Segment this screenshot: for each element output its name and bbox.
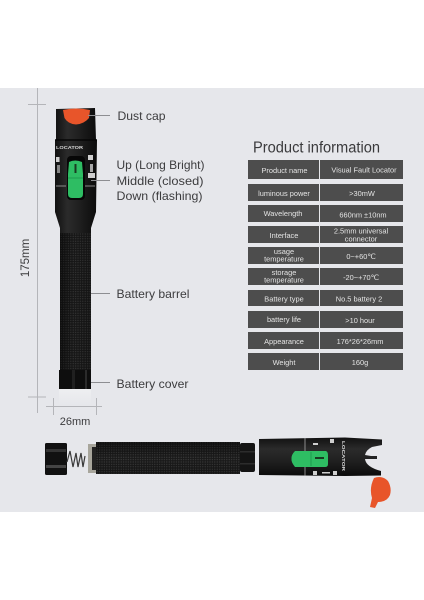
dimension: width 26mm: 26mm	[60, 416, 90, 428]
heading: product information: Product information	[253, 140, 380, 156]
row: storage temperature: storage	[272, 268, 296, 277]
pen head	[55, 108, 97, 233]
markings	[313, 439, 337, 475]
green slider	[67, 156, 85, 200]
row: product name: Visual Fault Locator	[331, 166, 397, 174]
background panel	[0, 88, 424, 512]
row: storage temperature: temperature	[264, 276, 304, 284]
product information table	[248, 160, 403, 370]
pen reflection	[59, 389, 91, 405]
open dust cap	[370, 477, 391, 508]
dust cap	[63, 108, 90, 124]
label: dust cap	[88, 109, 166, 123]
row: interface: 2.5mm universal	[334, 226, 388, 236]
row: storage temperature	[248, 268, 403, 285]
battery cover	[45, 443, 67, 475]
label: switch positions: Down (flashing)	[116, 189, 202, 203]
dimension: height 175mm: 175mm	[20, 239, 32, 277]
battery barrel	[60, 233, 91, 370]
barrel	[96, 442, 240, 474]
row: appearance: 176*26*26mm	[337, 337, 383, 346]
row: usage temperature: 0~+60℃	[346, 252, 376, 261]
row: battery type: No.5 battery 2	[336, 294, 382, 304]
row: weight	[248, 353, 403, 370]
label: dust cap: Dust cap	[118, 109, 166, 123]
disassembled pen	[45, 438, 391, 508]
barrel connector	[88, 444, 96, 473]
battery cover	[59, 370, 91, 389]
row: battery life: >10 hour	[345, 316, 375, 325]
row: battery type	[248, 290, 403, 306]
row: interface: connector	[345, 234, 378, 244]
dimension: width 26mm	[46, 398, 102, 428]
row: wavelength: Wavelength	[264, 209, 302, 218]
row: storage temperature: -20~+70℃	[343, 273, 379, 282]
row: appearance: Appearance	[264, 337, 304, 346]
row: weight: 160g	[352, 358, 368, 367]
collar	[240, 443, 255, 472]
row: product name: Product name	[261, 166, 308, 175]
row: battery life: battery life	[267, 315, 301, 324]
row: usage temperature	[248, 247, 403, 264]
row: usage temperature: temperature	[264, 254, 304, 264]
row: battery type: Battery type	[264, 294, 304, 304]
label: battery cover: Battery cover	[116, 377, 188, 391]
row: appearance	[248, 332, 403, 349]
row: luminous power: >30mW	[349, 189, 375, 198]
label: switch positions: Up (Long Bright)	[116, 158, 204, 172]
pen body	[259, 438, 382, 476]
row: usage temperature: usage	[274, 247, 294, 256]
row: luminous power: luminous power	[258, 189, 310, 198]
label: switch positions: Middle (closed)	[116, 174, 204, 188]
vertical pen	[55, 108, 97, 389]
green slider	[291, 451, 328, 467]
row: luminous power	[248, 184, 403, 201]
locator label: LOCATOR	[341, 441, 346, 472]
label: battery barrel: Battery barrel	[116, 287, 190, 301]
row: wavelength: 660nm ±10nm	[339, 210, 387, 220]
row: weight: Weight	[273, 358, 295, 367]
locator label: LOCATOR	[56, 145, 84, 150]
spring	[67, 451, 85, 467]
row: battery life	[248, 311, 403, 328]
row: interface: Interface	[270, 231, 298, 240]
row: product name	[248, 160, 403, 179]
row: interface	[248, 226, 403, 244]
switch markings	[56, 155, 95, 178]
row: wavelength	[248, 205, 403, 222]
label: switch positions	[91, 158, 204, 203]
